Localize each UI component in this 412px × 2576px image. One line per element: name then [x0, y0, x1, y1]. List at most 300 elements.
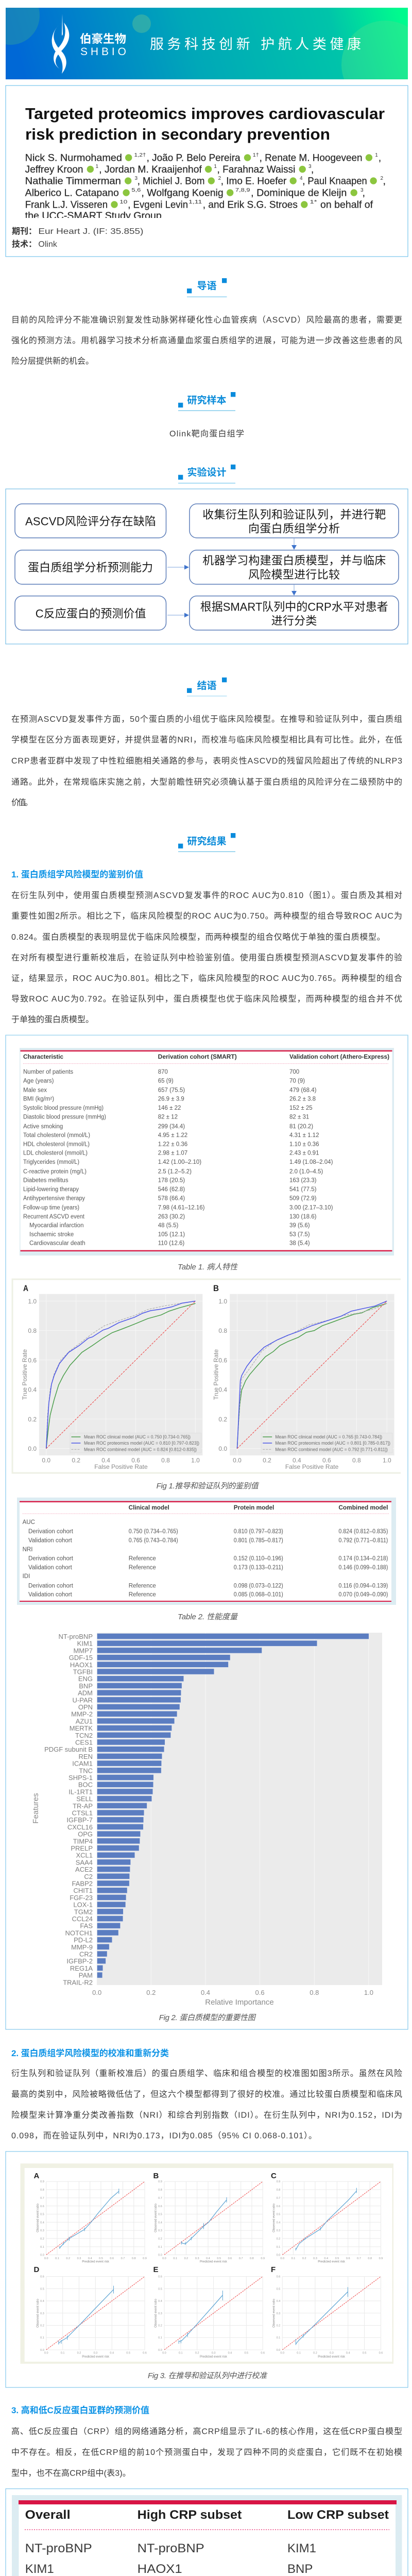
text block: result 1: 0.824。蛋白质模型的表现明显优于临床风险模型，而两种模型的组合仅略优于单独的蛋白质模型。: [11, 933, 385, 942]
table 1: patient characteristics: 870: [158, 1069, 168, 1075]
tagline: 服务科技创新 护航人类健康: [150, 37, 361, 52]
logo text: [80, 32, 126, 58]
authors list: ,: [383, 176, 386, 187]
feature labels: CR2: [79, 1951, 93, 1958]
ROC plot A: False Positive Rate: [94, 1463, 148, 1470]
top row axis ticks: 0.2: [40, 2238, 44, 2241]
ROC plot B: 0.4: [218, 1386, 227, 1393]
table 1: patient characteristics: Active smoking: [23, 1124, 63, 1130]
axis titles: Observed event ratio: [273, 2203, 276, 2232]
table 1: patient characteristics: LDL cholesterol (mmol/L): [23, 1150, 88, 1157]
caption: table 1: Table 1. 病人特性: [178, 1263, 238, 1272]
feature labels: HAOX1: [70, 1661, 93, 1669]
top row axis ticks: 0.9: [379, 2257, 383, 2260]
ROC plot A: Mean ROC clinical model (AUC = 0.750 [0.734-0.765]): [84, 1434, 191, 1440]
table 1: patient characteristics: 110 (12.6): [158, 1241, 184, 1247]
authors list: , Imo E. Hoefer: [221, 176, 287, 187]
table 2: performance measures: 0.824 (0.812–0.835): [338, 1529, 388, 1535]
axis titles: Predicted event risk: [200, 2261, 228, 2264]
top row axis ticks: 0.5: [40, 2213, 44, 2216]
table 1: patient characteristics: 48 (5.5): [158, 1223, 179, 1229]
figure 1: ROC curves: [12, 1278, 406, 1475]
paper title: risk prediction in secondary prevention: [25, 125, 330, 143]
table 1: patient characteristics: 152 ± 25: [289, 1105, 313, 1111]
top row axis ticks: 0.7: [158, 2197, 162, 2200]
table 1: patient characteristics: 1.22 ± 0.36: [158, 1141, 187, 1147]
bottom row axis ticks: 0.1: [297, 2351, 301, 2354]
feature labels: CXCL16: [67, 1823, 93, 1831]
top row axis ticks: 0.5: [158, 2213, 162, 2216]
ROC plot A: 0.2: [28, 1416, 37, 1423]
top row axis ticks: 0.3: [313, 2257, 317, 2260]
ROC plot A: A: [23, 1283, 28, 1293]
feature labels: PAM: [79, 1972, 93, 1979]
authors list: Frank L.J. Visseren: [25, 200, 108, 210]
authors list: 2: [218, 176, 221, 181]
table 1: patient characteristics: 2.43 ± 0.91: [289, 1150, 319, 1157]
box: machine learning model: 机器学习构建蛋白质模型，并与临床: [202, 554, 386, 567]
technology line: 技术：: [12, 239, 37, 249]
ROC plot B: 0.4: [293, 1457, 301, 1464]
authors list: , Dominique de Kleijn: [251, 188, 347, 199]
bottom row axis ticks: 0.5: [244, 2351, 248, 2354]
table 1: patient characteristics: 70 (9): [289, 1078, 305, 1084]
box: machine learning model: [190, 550, 399, 584]
heading: 导语: 导语: [197, 280, 217, 292]
table 2: performance measures: Protein model: [234, 1505, 274, 1511]
ROC plot A: Mean ROC proteomics model (AUC = 0.810 [0.797-0.823]): [84, 1440, 199, 1446]
top row axis ticks: 0.6: [228, 2257, 232, 2260]
top row axis ticks: 0.3: [158, 2229, 162, 2232]
feature labels: OPN: [78, 1703, 93, 1711]
heading: 实验设计: [178, 465, 235, 483]
feature labels: MMP7: [73, 1647, 93, 1654]
top row axis ticks: 0.3: [277, 2229, 280, 2232]
authors list: Jeffrey Kroon: [25, 164, 83, 175]
ROC plot B: 1.0: [218, 1298, 227, 1305]
authors list: Nathalie Timmerman: [25, 176, 121, 187]
heading: 结语: 结语: [197, 680, 217, 691]
paper title: Targeted proteomics improves cardiovascular: [25, 105, 385, 123]
feature labels: CES1: [75, 1738, 93, 1747]
authors list: 1*: [310, 199, 317, 205]
top row axis ticks: 0.4: [206, 2257, 210, 2260]
box: CRP predictive value: C反应蛋白的预测价值: [36, 607, 146, 620]
table 3: most important proteins: [12, 2495, 402, 2576]
top row axis ticks: 0.5: [335, 2257, 339, 2260]
text block: introduction: [11, 315, 402, 366]
panel letters: E: [153, 2265, 159, 2274]
axis titles: Observed event ratio: [37, 2203, 40, 2232]
ROC plot B: Mean ROC clinical model (AUC = 0.765 [0.743-0.784]): [275, 1434, 382, 1440]
text block: conclusion: 通路。此外，在常规临床实施之前，大型前瞻性研究必须确认基于蛋白质组的风险评分在二级预防中的: [11, 777, 402, 787]
feature labels: SAA4: [76, 1858, 93, 1866]
feature labels: ICAM1: [72, 1760, 93, 1768]
panel: experimental design flowchart: [6, 489, 408, 644]
axes labels: 0.2: [146, 1989, 156, 1996]
heading: 研究样本: [178, 392, 235, 411]
authors list: , Jordan M. Kraaijenhof: [99, 164, 202, 175]
journal line: [12, 227, 143, 236]
ROC plot A: 0.0: [28, 1445, 37, 1452]
top row axis ticks: 0.1: [40, 2246, 44, 2249]
text block: result 2: 衍生队列和验证队列（重新校准后）的蛋白质组学、临床和组合模型的校准图如图3所示。虽然在风险: [11, 2069, 402, 2078]
table 1: patient characteristics: Systolic blood pressure (mmHg): [23, 1105, 104, 1111]
feature labels: NT-proBNP: [59, 1633, 93, 1640]
table 1: patient characteristics: 178 (20.5): [158, 1177, 185, 1183]
subheading 1: 1. 蛋白质组学风险模型的鉴别价值: [11, 869, 143, 879]
ROC plot B: 0.0: [233, 1457, 242, 1464]
feature labels: TCN2: [75, 1732, 93, 1739]
top row axis ticks: 0.6: [110, 2257, 114, 2260]
table 3: most important proteins: Overall: [25, 2508, 71, 2522]
arrow: row 2 to row 3: [291, 585, 297, 596]
table 1: patient characteristics: Male sex: [23, 1087, 47, 1093]
feature labels: IL-1RT1: [68, 1788, 93, 1795]
bottom row axis ticks: 0.2: [313, 2351, 317, 2354]
text block: result 3: 高、低C反应蛋白（CRP）组的网络通路分析，高CRP组显示了IL-6的核心作用，这在低CRP蛋白模型: [11, 2427, 402, 2436]
table 2: performance measures: 0.098 (0.073–0.122): [234, 1583, 283, 1589]
logo text: 伯豪生物: [80, 32, 126, 45]
authors list: 1: [96, 164, 99, 170]
ROC plot B: False Positive Rate: [285, 1463, 339, 1470]
text block: result 1: 在对所有模型进行重新校准后，在验证队列中检验鉴别值。使用蛋白质模型预测ASCVD复发事件的验: [11, 953, 402, 962]
heading: 结语: [187, 677, 227, 697]
plot C grid and curve: [282, 2181, 381, 2255]
text block: introduction: 险分层提供新的机会。: [11, 357, 94, 366]
ROC plot B: 0.0: [218, 1445, 227, 1452]
plot F grid and curve: [282, 2277, 381, 2350]
box: CRP predictive value: [15, 596, 166, 630]
ROC plot B: 0.8: [218, 1327, 227, 1334]
top row axis ticks: 0.0: [44, 2257, 48, 2260]
table 2: performance measures: 0.765 (0.743–0.784): [129, 1537, 178, 1544]
bottom row axis ticks: 0.5: [126, 2351, 130, 2354]
authors list: , Wolfgang Koenig: [141, 188, 224, 199]
table 1: patient characteristics: 105 (12.1): [158, 1231, 185, 1238]
top row axis ticks: 0.5: [217, 2257, 221, 2260]
feature labels: SHPS-1: [68, 1774, 93, 1782]
top row axis ticks: 0.4: [277, 2222, 280, 2225]
authors list: 10: [119, 199, 128, 205]
box: cohorts and targeted proteomics: [190, 504, 399, 538]
table 3: most important proteins: High CRP subset: [138, 2508, 242, 2522]
feature labels: ADM: [78, 1689, 93, 1697]
bottom row axis ticks: 0.6: [143, 2351, 147, 2354]
feature labels: IGFBP-2: [66, 1957, 93, 1965]
table 2: performance measures: Clinical model: [129, 1505, 169, 1511]
table 1: patient characteristics: 2.5 (1.2–5.2): [158, 1168, 192, 1175]
bottom row axis ticks: 0.1: [158, 2336, 162, 2340]
table 1: patient characteristics: 4.95 ± 1.22: [158, 1132, 187, 1139]
table 1: patient characteristics: C-reactive protein (mg/L): [23, 1168, 87, 1175]
feature labels: FABP2: [72, 1879, 93, 1888]
logo text: SHBIO: [80, 46, 126, 58]
table 1: patient characteristics: 82 ± 31: [289, 1114, 309, 1120]
table 3: most important proteins: NT-proBNP: [138, 2541, 204, 2555]
table 1: patient characteristics: 130 (18.6): [289, 1214, 317, 1220]
authors list: , Farahnaz Waissi: [217, 164, 295, 175]
bottom row axis ticks: 0.2: [77, 2351, 81, 2354]
ROC plot B: 0.8: [352, 1457, 361, 1464]
axis titles: [37, 2203, 346, 2359]
top row axis ticks: [40, 2180, 383, 2260]
top row axis ticks: 0.8: [158, 2189, 162, 2192]
bottom row axis ticks: 0.1: [40, 2336, 44, 2340]
table 2: performance measures: Combined model: [338, 1505, 388, 1511]
top row axis ticks: 0.7: [121, 2257, 125, 2260]
ROC plot B: 0.6: [218, 1357, 227, 1364]
panel: paper info card: [6, 86, 408, 257]
panel: figures card for result 1: [6, 1035, 408, 2029]
journal line: 期刊：: [12, 227, 37, 236]
top row axis ticks: 0.8: [368, 2257, 372, 2260]
plot D grid and curve: [46, 2277, 145, 2350]
authors list: 1†: [253, 152, 259, 158]
table 1: patient characteristics: Diastolic blood pressure (mmHg): [23, 1114, 106, 1120]
top row axis ticks: 0.8: [40, 2189, 44, 2192]
header banner: [6, 8, 408, 79]
heading: 研究结果: [178, 833, 235, 852]
table 1: patient characteristics: 546 (62.8): [158, 1187, 185, 1193]
table 1: patient characteristics: 700: [289, 1069, 299, 1075]
authors list: 4: [300, 176, 303, 181]
bottom row axis ticks: 0.4: [346, 2351, 350, 2354]
bottom row axis ticks: 0.4: [228, 2351, 232, 2354]
feature labels: SELL: [76, 1795, 93, 1803]
authors list: , Michiel J. Bom: [138, 176, 204, 187]
panel: figure 3 card: [6, 2151, 408, 2387]
top row axis ticks: 0.8: [250, 2257, 254, 2260]
bottom row axis ticks: 0.2: [158, 2325, 162, 2328]
table 2: performance measures: 0.070 (0.049–0.090): [338, 1592, 388, 1598]
text block: result 1: 于单独的蛋白质模型。: [11, 1015, 94, 1024]
feature labels: ENG: [78, 1675, 93, 1683]
plot A grid and curve: [46, 2181, 145, 2255]
text block: introduction: 强化的预测方法。用机器学习技术分析高通量血浆蛋白质组学的进展，可能为进一步改善这些患者的风: [11, 336, 402, 345]
feature labels: NOTCH1: [65, 1929, 93, 1937]
ROC plot A: 0.8: [28, 1327, 37, 1334]
top row axis ticks: 0.6: [40, 2205, 44, 2208]
text block: introduction: 目前的风险评分不能准确识别复发性动脉粥样硬化性心血管疾病（ASCVD）风险最高的患者，需要更: [11, 315, 402, 325]
bottom row axis ticks: 0.5: [277, 2287, 280, 2291]
table 2: performance measures: Reference: [129, 1565, 156, 1571]
feature labels: C2: [84, 1873, 93, 1880]
table 2: performance measures: Reference: [129, 1555, 156, 1562]
feature labels: GDF-15: [69, 1654, 93, 1662]
bottom row axis ticks: 0.3: [212, 2351, 215, 2354]
feature labels: AZU1: [76, 1717, 93, 1725]
table 2: performance measures: 0.173 (0.133–0.211): [234, 1565, 283, 1571]
axis titles: Observed event ratio: [154, 2298, 158, 2328]
ROC plot B: 1.0: [383, 1457, 391, 1464]
ROC plot A: 0.0: [42, 1457, 50, 1464]
feature labels: TGM2: [74, 1908, 93, 1916]
bottom row axis ticks: 0.1: [179, 2351, 183, 2354]
arrow: protein capacity to model: [167, 565, 189, 570]
axes labels: 0.4: [201, 1989, 210, 1996]
icon: helix logo: [52, 14, 69, 74]
ROC plot B: 0.2: [218, 1416, 227, 1423]
feature labels: KIM1: [77, 1640, 93, 1648]
table 1: patient characteristics: Ischaemic stroke: [29, 1231, 74, 1238]
top row axis ticks: 0.6: [158, 2205, 162, 2208]
text block: result 2: [11, 2069, 402, 2140]
heading: 研究样本: 研究样本: [187, 394, 227, 406]
bottom row axis ticks: 0.4: [40, 2300, 44, 2303]
top row axis ticks: 0.0: [280, 2257, 284, 2260]
bottom row axis ticks: 0.3: [330, 2351, 334, 2354]
authors list: [21, 152, 386, 222]
table 3: most important proteins: BNP: [287, 2562, 313, 2576]
table 2: performance measures: Derivation cohort: [28, 1529, 74, 1535]
feature labels: TIMP4: [73, 1837, 93, 1845]
top row axis ticks: 0.5: [99, 2257, 103, 2260]
text: study sample: Olink靶向蛋白组学: [169, 429, 244, 438]
bottom row axis ticks: 0.0: [44, 2351, 48, 2354]
text block: result 2: 0.098，而在验证队列中，NRI为0.173，IDI为0.085（95% CI 0.068-0.101）。: [11, 2131, 317, 2140]
axis titles: Predicted event risk: [318, 2261, 346, 2264]
feature labels: XCL1: [76, 1852, 93, 1859]
table 2: performance measures: 0.174 (0.134–0.218): [338, 1555, 388, 1562]
top row axis ticks: 0.9: [143, 2257, 147, 2260]
feature labels: BOC: [78, 1781, 93, 1789]
table 2: performance measures: 0.810 (0.797–0.823): [234, 1529, 283, 1535]
table 1: patient characteristics: 541 (77.5): [289, 1187, 317, 1193]
table 1: patient characteristics: 53 (7.5): [289, 1231, 310, 1238]
authors list: Nick S. Nurmohamed: [25, 152, 122, 164]
table 1: patient characteristics: Myocardial infarction: [29, 1223, 83, 1229]
table 1: patient characteristics: BMI (kg/m²): [23, 1096, 54, 1103]
heading: 导语: [187, 278, 227, 297]
ROC plot A: 1.0: [28, 1298, 37, 1305]
bottom row axis ticks: 0.4: [110, 2351, 114, 2354]
bottom row axis ticks: 0.5: [158, 2287, 162, 2291]
table 1: patient characteristics: Triglycerides (mmol/L): [23, 1159, 79, 1165]
box: SMART cohort CRP classification: [190, 596, 399, 630]
box: ASCVD risk score gap: ASCVD风险评分存在缺陷: [25, 515, 156, 528]
bottom row axis ticks: 0.6: [277, 2275, 280, 2278]
ROC plot A: Mean ROC combined model (AUC = 0.824 [0.812-0.835]): [84, 1447, 197, 1453]
table 1: patient characteristics: Total cholesterol (mmol/L): [23, 1132, 90, 1139]
table 2: performance measures: NRI: [23, 1547, 32, 1553]
bottom row axis ticks: 0.3: [94, 2351, 97, 2354]
bottom row axis ticks: 0.1: [277, 2336, 280, 2340]
feature labels: TGFBI: [73, 1668, 93, 1675]
feature labels: OPG: [78, 1831, 93, 1838]
axes labels: 0.6: [255, 1989, 265, 1996]
top row axis ticks: 0.7: [357, 2257, 361, 2260]
ROC plot A: 1.0: [191, 1457, 200, 1464]
feature labels: BNP: [79, 1682, 93, 1690]
text block: result 1: 重要性如图2所示。相比之下，临床风险模型的ROC AUC为0.750。两种模型的组合导致ROC AUC为: [11, 911, 402, 921]
authors list: , Renate M. Hoogeveen: [260, 152, 363, 164]
table 2: performance measures: 0.116 (0.094–0.139): [338, 1583, 388, 1589]
feature labels: FGF-23: [70, 1894, 93, 1902]
top row axis ticks: 0.2: [302, 2257, 306, 2260]
text block: result 3: [11, 2427, 402, 2478]
feature labels: MMP-9: [71, 1943, 93, 1951]
feature labels: LOX-1: [73, 1901, 93, 1909]
panel letters: B: [153, 2172, 159, 2180]
paper title: [25, 105, 385, 143]
table 2: performance measures: Reference: [129, 1592, 156, 1598]
table 1: patient characteristics: Number of patients: [23, 1069, 73, 1075]
ROC plot B: [212, 1283, 394, 1470]
feature labels: CTSL1: [72, 1809, 93, 1817]
axis titles: Observed event ratio: [154, 2203, 158, 2232]
panel letters: C: [271, 2172, 277, 2180]
box: ASCVD risk score gap: [15, 504, 166, 538]
top row axis ticks: 0.0: [162, 2257, 166, 2260]
feature labels: REG1A: [70, 1964, 93, 1972]
bottom row axis ticks: 0.3: [158, 2312, 162, 2315]
top row axis ticks: 0.9: [261, 2257, 265, 2260]
ROC plot B: 0.2: [263, 1457, 271, 1464]
feature labels: PRELP: [71, 1844, 93, 1852]
table 3: most important proteins: HAOX1: [138, 2562, 182, 2576]
top row axis ticks: 0.4: [158, 2222, 162, 2225]
text block: result 1: [11, 891, 402, 1024]
table 1: patient characteristics: 1.42 (1.00–2.10): [158, 1159, 201, 1165]
table 1: patient characteristics: 39 (5.6): [289, 1223, 310, 1229]
bottom row axis ticks: 0.5: [40, 2287, 44, 2291]
bars: [97, 1633, 369, 1978]
table 1: patient characteristics: 1.10 ± 0.36: [289, 1141, 319, 1147]
feature labels: ACE2: [75, 1866, 93, 1873]
table 1: patient characteristics: 2.98 ± 1.07: [158, 1150, 187, 1157]
ROC plot B: Mean ROC combined model (AUC = 0.792 [0.771-0.811]): [275, 1447, 388, 1453]
feature labels: [44, 1633, 93, 1986]
ROC plot B: Mean ROC proteomics model (AUC = 0.801 [0.785-0.817]): [275, 1440, 390, 1446]
box: cohorts and targeted proteomics: 收集衍生队列和验证队列，并进行靶: [202, 508, 386, 521]
axis titles: Predicted event risk: [82, 2355, 110, 2359]
ROC plot A: 0.6: [28, 1357, 37, 1364]
box: machine learning model: 风险模型进行比较: [248, 568, 340, 581]
table 1: patient characteristics: 146 ± 22: [158, 1105, 181, 1111]
text block: result 1: 在衍生队列中，使用蛋白质模型预测ASCVD复发事件的ROC AUC为0.810（图1）。蛋白质及其相对: [11, 891, 402, 900]
top row axis ticks: 0.4: [324, 2257, 328, 2260]
top row axis ticks: 0.3: [195, 2257, 199, 2260]
top row axis ticks: 0.0: [277, 2253, 280, 2257]
table 1: patient characteristics: Derivation cohort (SMART): [158, 1054, 237, 1060]
table 1: patient characteristics: 299 (34.4): [158, 1124, 185, 1130]
table 1: patient characteristics: Validation cohort (Athero-Express): [289, 1054, 389, 1060]
text block: result 3: 型中，也不在高CRP组中(表3)。: [11, 2468, 131, 2478]
subheading 3: 3. 高和低C反应蛋白亚群的预测价值: [11, 2405, 149, 2415]
plot B grid and curve: [164, 2181, 263, 2255]
figure 2: relative importance bar chart: [31, 1633, 382, 2007]
feature labels: TR-AP: [73, 1802, 93, 1810]
top row axis ticks: 0.3: [77, 2257, 81, 2260]
table 1: patient characteristics: Follow-up time (years): [23, 1205, 79, 1211]
bottom row axis ticks: 0.2: [277, 2325, 280, 2328]
authors list: 2: [380, 176, 383, 181]
bottom row axis ticks: 0.0: [162, 2351, 166, 2354]
top row axis ticks: 0.2: [184, 2257, 188, 2260]
top row axis ticks: 0.9: [277, 2180, 280, 2183]
box: cohorts and targeted proteomics: 向蛋白质组学分析: [248, 522, 340, 535]
axis titles: Observed event ratio: [37, 2298, 40, 2328]
technology line: Olink: [38, 240, 58, 249]
ROC plot B: B: [213, 1283, 219, 1293]
authors list: , Evgeni Levin: [128, 200, 188, 210]
top row axis ticks: 0.7: [239, 2257, 243, 2260]
table 2: performance measures: 0.792 (0.771–0.811): [338, 1537, 388, 1544]
bottom row axis ticks: 0.3: [277, 2312, 280, 2315]
table 2: performance measures: Validation cohort: [28, 1537, 73, 1544]
table 1: patient characteristics: Antihypertensive therapy: [23, 1195, 85, 1201]
